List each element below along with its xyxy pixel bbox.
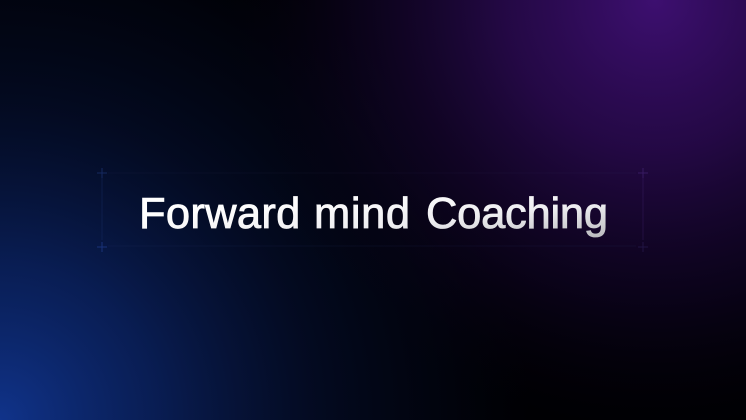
icon: plus top right xyxy=(638,168,648,178)
icon: plus top left xyxy=(97,168,107,178)
icon: plus bottom right xyxy=(638,242,648,252)
title: Coaching xyxy=(426,190,608,238)
decorative frame around title xyxy=(97,168,648,252)
icon: plus bottom left xyxy=(97,242,107,252)
title: Forward xyxy=(139,190,301,238)
title: mind xyxy=(314,190,411,238)
